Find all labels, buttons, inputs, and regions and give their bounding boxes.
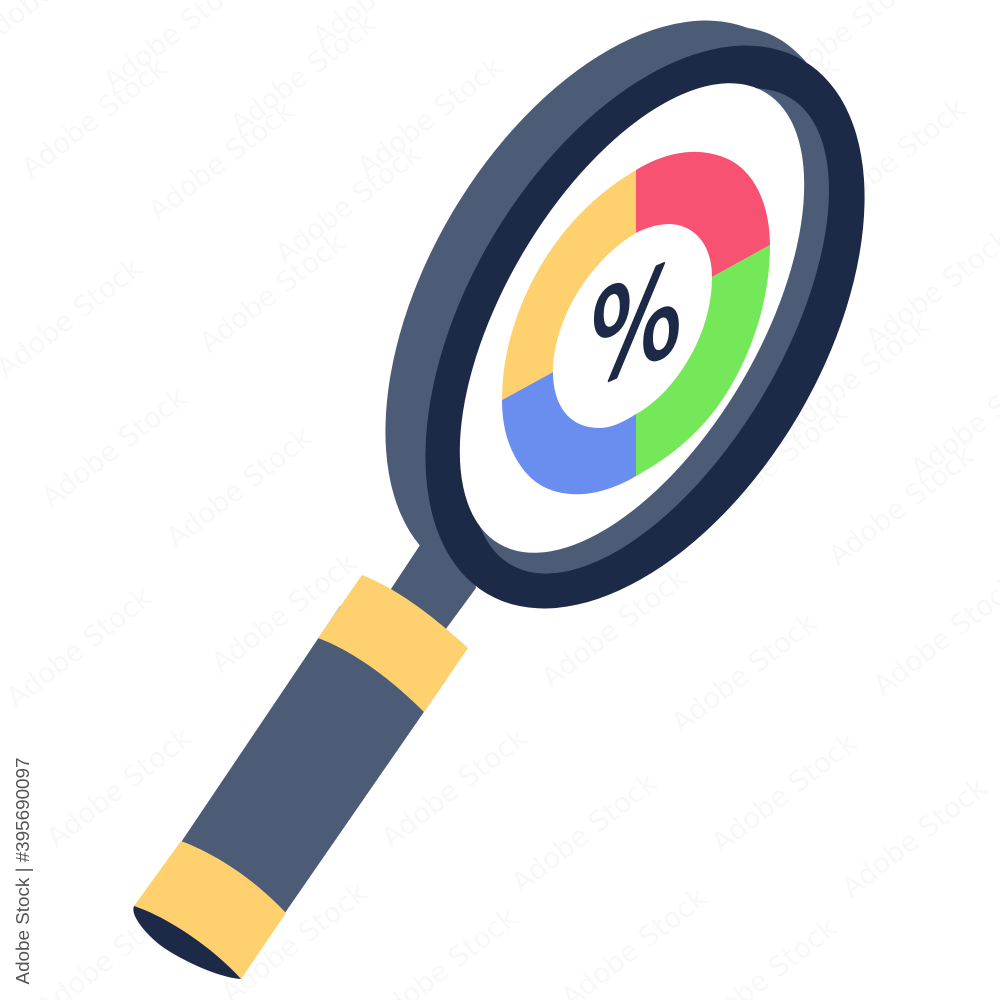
lens inner side wall	[398, 31, 902, 631]
segment: red	[636, 152, 770, 277]
handle end cap	[134, 841, 286, 979]
segment: green	[636, 245, 770, 476]
handle grip	[165, 606, 446, 936]
watermark pattern: Adobe Stock	[695, 395, 854, 529]
watermark pattern: Adobe Stock	[535, 560, 694, 694]
watermark pattern: Adobe Stock	[269, 136, 428, 270]
watermark pattern: Adobe Stock	[160, 420, 319, 554]
watermark pattern: Adobe Stock	[835, 770, 994, 904]
segment: blue	[502, 372, 636, 494]
watermark pattern: Adobe Stock	[40, 720, 199, 854]
lens rim front	[335, 0, 955, 684]
watermark pattern: Adobe Stock	[224, 6, 383, 140]
segment: yellow	[502, 170, 636, 400]
percent symbol: %	[587, 231, 685, 418]
watermark pattern: Adobe Stock	[705, 725, 864, 859]
watermark pattern: Adobe Stock	[35, 380, 194, 514]
watermark pattern: Adobe Stock	[0, 580, 159, 714]
watermark pattern: Adobe Stock	[142, 93, 301, 227]
lens glass	[390, 28, 874, 608]
watermark pattern: Adobe Stock	[15, 50, 174, 184]
watermark pattern: Adobe Stock	[777, 308, 936, 442]
watermark pattern: Adobe Stock	[505, 765, 664, 899]
watermark pattern: Adobe Stock	[205, 545, 364, 679]
watermark pattern: Adobe Stock	[478, 92, 637, 226]
lens rim side	[295, 0, 915, 659]
watermark pattern: Adobe Stock	[193, 225, 352, 359]
handle collar	[318, 575, 468, 712]
watermark pattern: Adobe Stock	[351, 49, 510, 183]
donut chart	[502, 152, 770, 494]
watermark pattern: Adobe Stock	[687, 48, 846, 182]
stock id line: Adobe Stock | #395690097	[13, 758, 33, 984]
watermark pattern: Adobe Stock	[375, 720, 534, 854]
watermark pattern: Adobe Stock	[822, 438, 981, 572]
watermark pattern: Adobe Stock	[814, 91, 973, 225]
handle end opening	[133, 906, 241, 979]
watermark pattern: Adobe Stock	[665, 605, 824, 739]
handle neck	[385, 542, 476, 637]
